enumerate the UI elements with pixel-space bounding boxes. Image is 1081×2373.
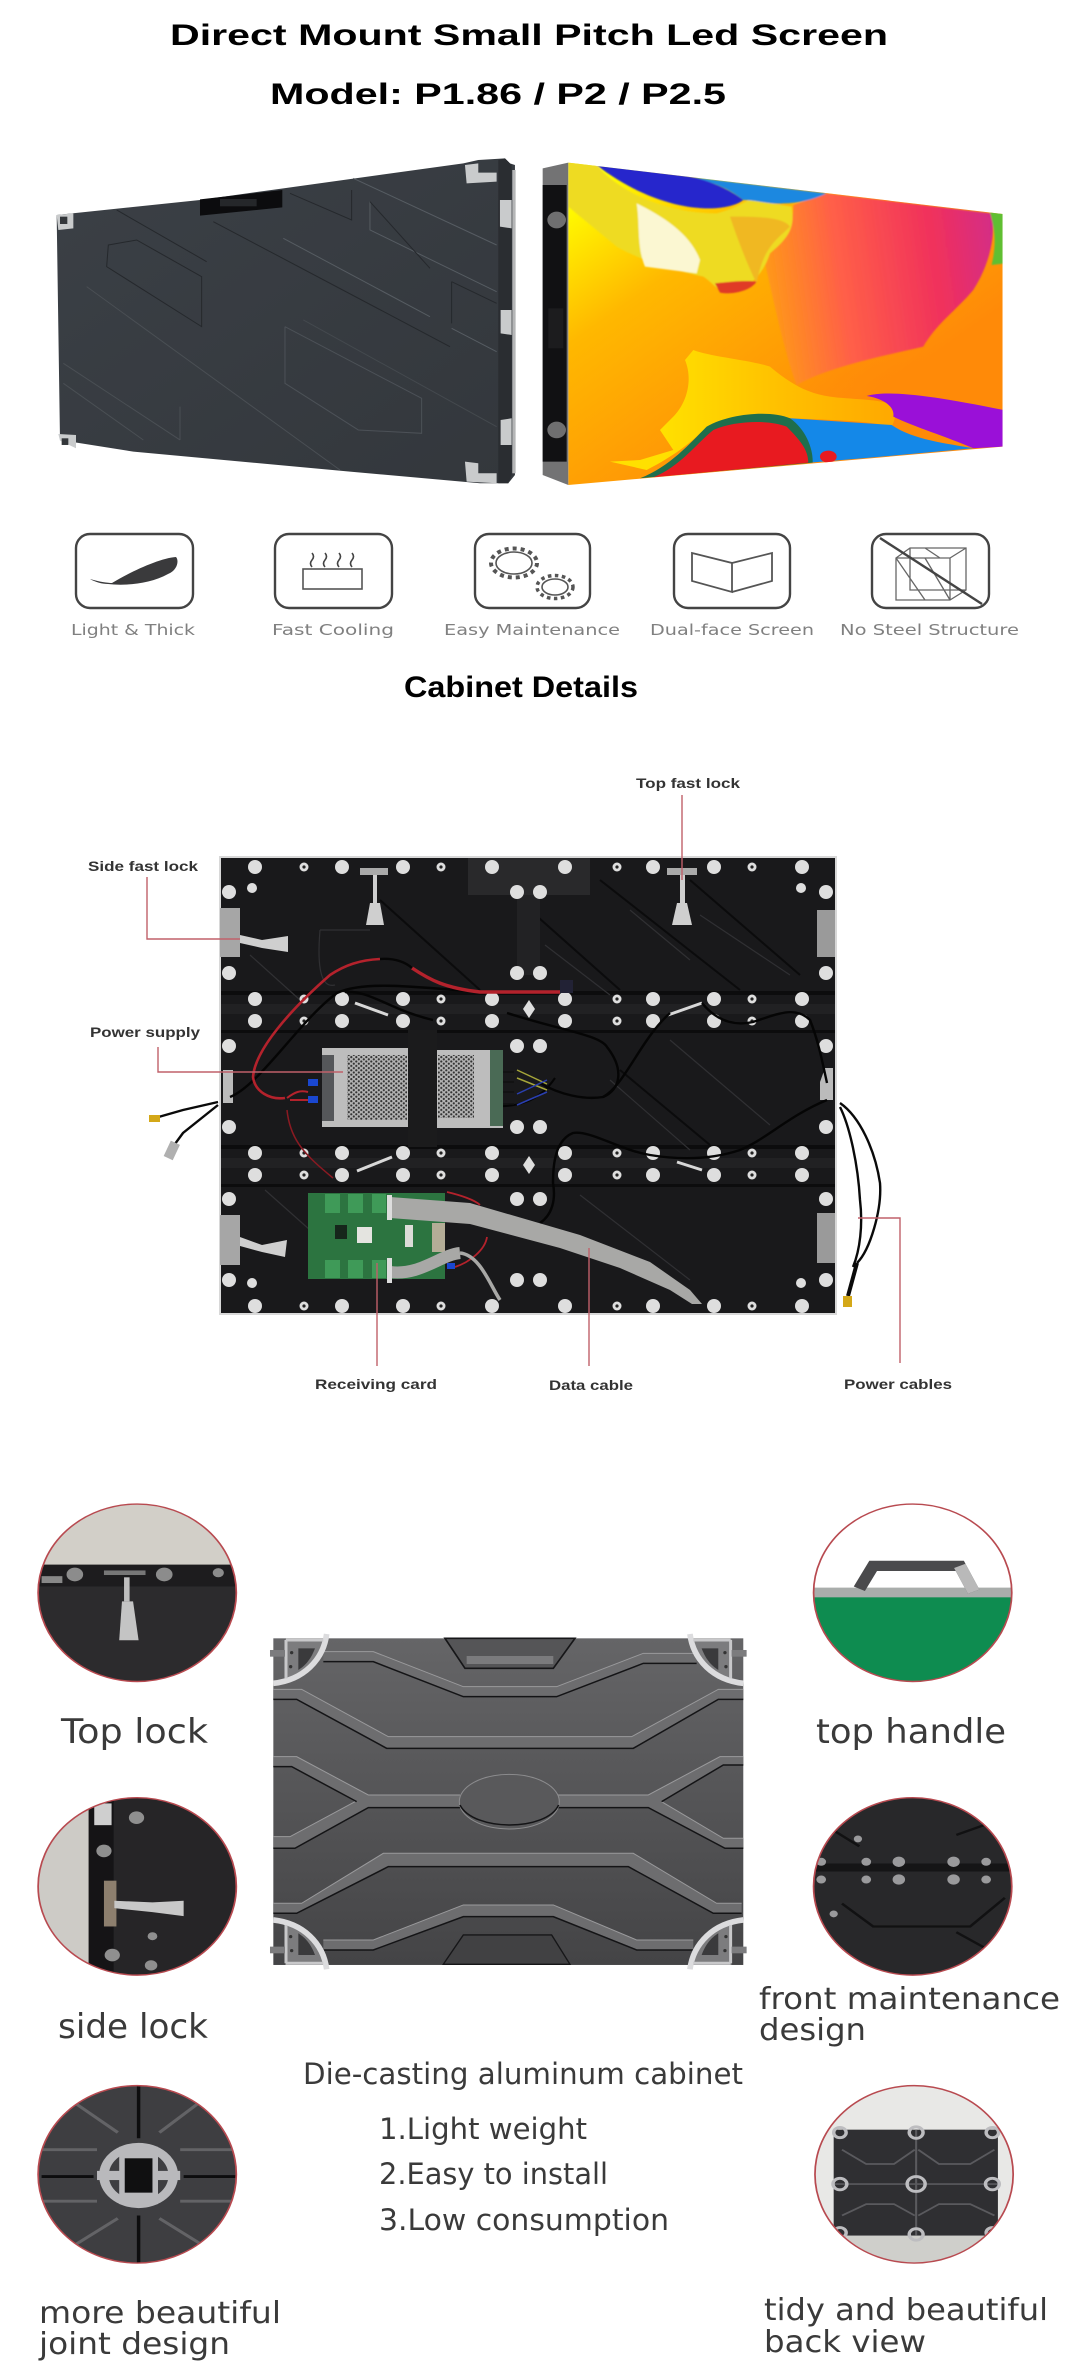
icon: crossed steel frame, no steel structure bbox=[840, 534, 1019, 639]
callout: side fast lock: Side fast lock bbox=[88, 858, 198, 874]
callout: side fast lock bbox=[88, 858, 240, 939]
label: more beautiful joint design: more beautiful bbox=[39, 2296, 281, 2331]
heading: cabinet details: Cabinet Details bbox=[404, 671, 638, 704]
icon: heat, fast cooling: Fast Cooling bbox=[272, 621, 394, 639]
icon: gears, easy maintenance: Easy Maintenance bbox=[444, 621, 620, 639]
label: more beautiful joint design bbox=[38, 2296, 281, 2362]
circle: top handle detail bbox=[811, 1503, 1019, 1686]
text block: cabinet description bbox=[303, 2057, 743, 2237]
circle: side lock detail bbox=[35, 1795, 243, 1978]
callout: power cables: Power cables bbox=[844, 1376, 952, 1392]
icon: crossed steel frame, no steel structure: No Steel Structure bbox=[840, 621, 1019, 639]
label: tidy and beautiful back view bbox=[764, 2293, 1048, 2360]
label: front maintenance design: design bbox=[759, 2013, 866, 2048]
text block: cabinet description: 1.Light weight bbox=[379, 2112, 587, 2146]
circle: front maintenance detail bbox=[811, 1795, 1019, 1978]
icon: heat, fast cooling bbox=[272, 534, 394, 639]
text block: cabinet description: Die-casting aluminum cabinet bbox=[303, 2057, 743, 2091]
data cable bbox=[387, 1195, 702, 1304]
icon row: features bbox=[71, 534, 1019, 639]
callout: receiving card bbox=[315, 1263, 437, 1392]
callout: power supply: Power supply bbox=[90, 1024, 200, 1040]
callout: receiving card: Receiving card bbox=[315, 1376, 437, 1392]
callout: data cable: Data cable bbox=[549, 1377, 633, 1393]
silver link bars bbox=[355, 1003, 702, 1171]
external power cables bbox=[149, 1102, 880, 1307]
circle: back view detail bbox=[811, 2081, 1019, 2267]
icon: feather, light and thick: Light & Thick bbox=[71, 621, 195, 639]
label: front maintenance design: front maintenance bbox=[759, 1982, 1060, 2017]
panel: LED screen front view bbox=[543, 157, 1020, 490]
power supply bbox=[308, 1030, 547, 1147]
icon: gears, easy maintenance bbox=[444, 534, 620, 639]
callout: power supply bbox=[90, 1024, 343, 1072]
label: tidy and beautiful back view: tidy and beautiful bbox=[764, 2293, 1048, 2328]
callouts with leader lines bbox=[88, 775, 952, 1393]
receiving card bbox=[308, 1193, 445, 1279]
callout: power cables bbox=[844, 1218, 952, 1392]
icon: open book, dual-face screen bbox=[650, 534, 814, 639]
circle: top lock detail bbox=[35, 1503, 243, 1685]
title: Direct Mount Small Pitch Led Screen bbox=[170, 19, 888, 52]
label: tidy and beautiful back view: back view bbox=[764, 2325, 926, 2360]
red wires bbox=[253, 959, 560, 1267]
panel: cabinet rear photo with modules bbox=[149, 856, 880, 1315]
icon: feather, light and thick bbox=[71, 534, 195, 639]
circle: joint design detail bbox=[35, 2081, 243, 2267]
callout: top fast lock bbox=[636, 775, 740, 880]
label: top lock: Top lock bbox=[60, 1712, 208, 1752]
label: top handle: top handle bbox=[816, 1712, 1006, 1752]
label: more beautiful joint design: joint design bbox=[38, 2327, 230, 2362]
dots: mounting holes bbox=[222, 860, 833, 1313]
black wires bbox=[230, 986, 827, 1223]
label: side lock: side lock bbox=[58, 2007, 208, 2047]
text block: cabinet description: 3.Low consumption bbox=[379, 2203, 669, 2237]
panel: die-cast cabinet front bbox=[270, 1634, 747, 1969]
fast locks bbox=[220, 868, 835, 1265]
panel: LED cabinet rear view bbox=[57, 158, 516, 483]
model subtitle: Model: P1.86 / P2 / P2.5 bbox=[270, 78, 726, 111]
text block: cabinet description: 2.Easy to install bbox=[379, 2157, 608, 2191]
label: front maintenance design bbox=[759, 1982, 1060, 2048]
callout: top fast lock: Top fast lock bbox=[636, 775, 740, 791]
icon: open book, dual-face screen: Dual-face Screen bbox=[650, 621, 814, 639]
